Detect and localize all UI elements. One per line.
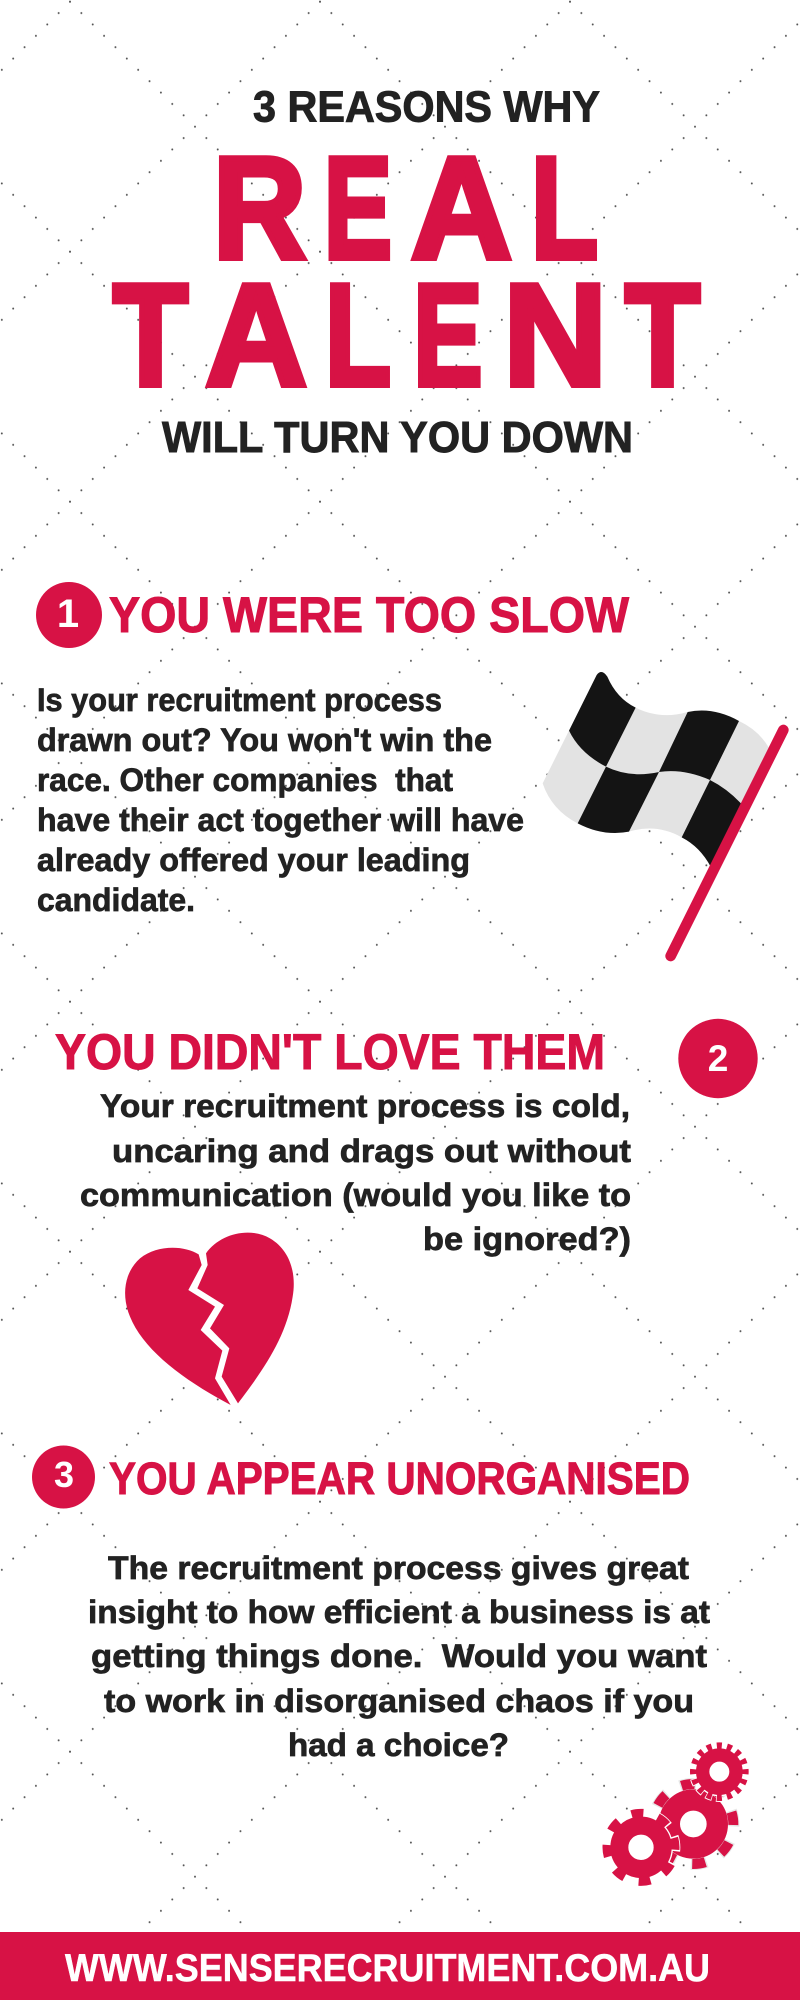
title word: talent: [113, 253, 700, 417]
body text: be ignored?): [423, 1221, 631, 1257]
title word: real: [213, 126, 598, 290]
icon: gears: [598, 1743, 748, 1890]
panel: reason 3: [32, 1446, 748, 1890]
panel: reason 2: [55, 1019, 758, 1405]
body text: [88, 1550, 710, 1763]
title word: talent: A: [205, 255, 307, 416]
title line: 3 reasons why: 3 REASONS WHY: [253, 82, 600, 132]
title word: real: L: [531, 127, 598, 290]
title line: will turn you down: WILL TURN YOU DOWN: [162, 413, 633, 462]
body text: Your recruitment process is cold,: [100, 1088, 630, 1124]
body text: drawn out? You won't win the: [37, 722, 492, 758]
icon: broken heart: [125, 1233, 294, 1405]
title word: talent: T: [625, 254, 700, 416]
body text: communication (would you like to: [80, 1177, 631, 1213]
number badge 1: 1: [57, 592, 79, 636]
website url: WWW.SENSERECRUITMENT.COM.AU: [65, 1947, 710, 1990]
body text: candidate.: [37, 882, 195, 918]
body text: getting things done. Would you want: [91, 1638, 707, 1674]
body text: to work in disorganised chaos if you: [104, 1683, 694, 1719]
title word: talent: E: [413, 254, 483, 416]
title word: real: R: [213, 128, 306, 290]
heading: you didn't love them: YOU DIDN'T LOVE THEM: [55, 1024, 605, 1080]
title word: real: E: [324, 126, 392, 289]
title word: talent: T: [113, 254, 188, 416]
panel: reason 1: [36, 582, 783, 956]
body text: race. Other companies that: [37, 762, 453, 798]
body text: [80, 1088, 631, 1257]
body text: already offered your leading: [37, 842, 470, 878]
body text: insight to how efficient a business is at: [88, 1594, 710, 1630]
number badge 3: 3: [54, 1454, 74, 1495]
body text: [37, 682, 524, 918]
body text: Is your recruitment process: [37, 682, 442, 718]
number badge 3: [32, 1446, 95, 1508]
icon: checkered flag: [543, 672, 783, 956]
body text: had a choice?: [288, 1727, 509, 1763]
title word: talent: N: [503, 253, 607, 416]
title word: real: A: [411, 128, 512, 290]
body text: have their act together will have: [37, 802, 524, 838]
body text: The recruitment process gives great: [108, 1550, 689, 1586]
footer banner: [0, 1932, 800, 2000]
number badge 2: 2: [708, 1038, 728, 1079]
body text: uncaring and drags out without: [112, 1133, 631, 1169]
heading: you were too slow: YOU WERE TOO SLOW: [109, 587, 630, 643]
number badge 1: [36, 582, 102, 648]
title: [113, 82, 700, 462]
title word: talent: L: [325, 255, 391, 417]
heading: you appear unorganised: YOU APPEAR UNORGANISED: [109, 1453, 690, 1504]
number badge 2: [678, 1019, 758, 1098]
